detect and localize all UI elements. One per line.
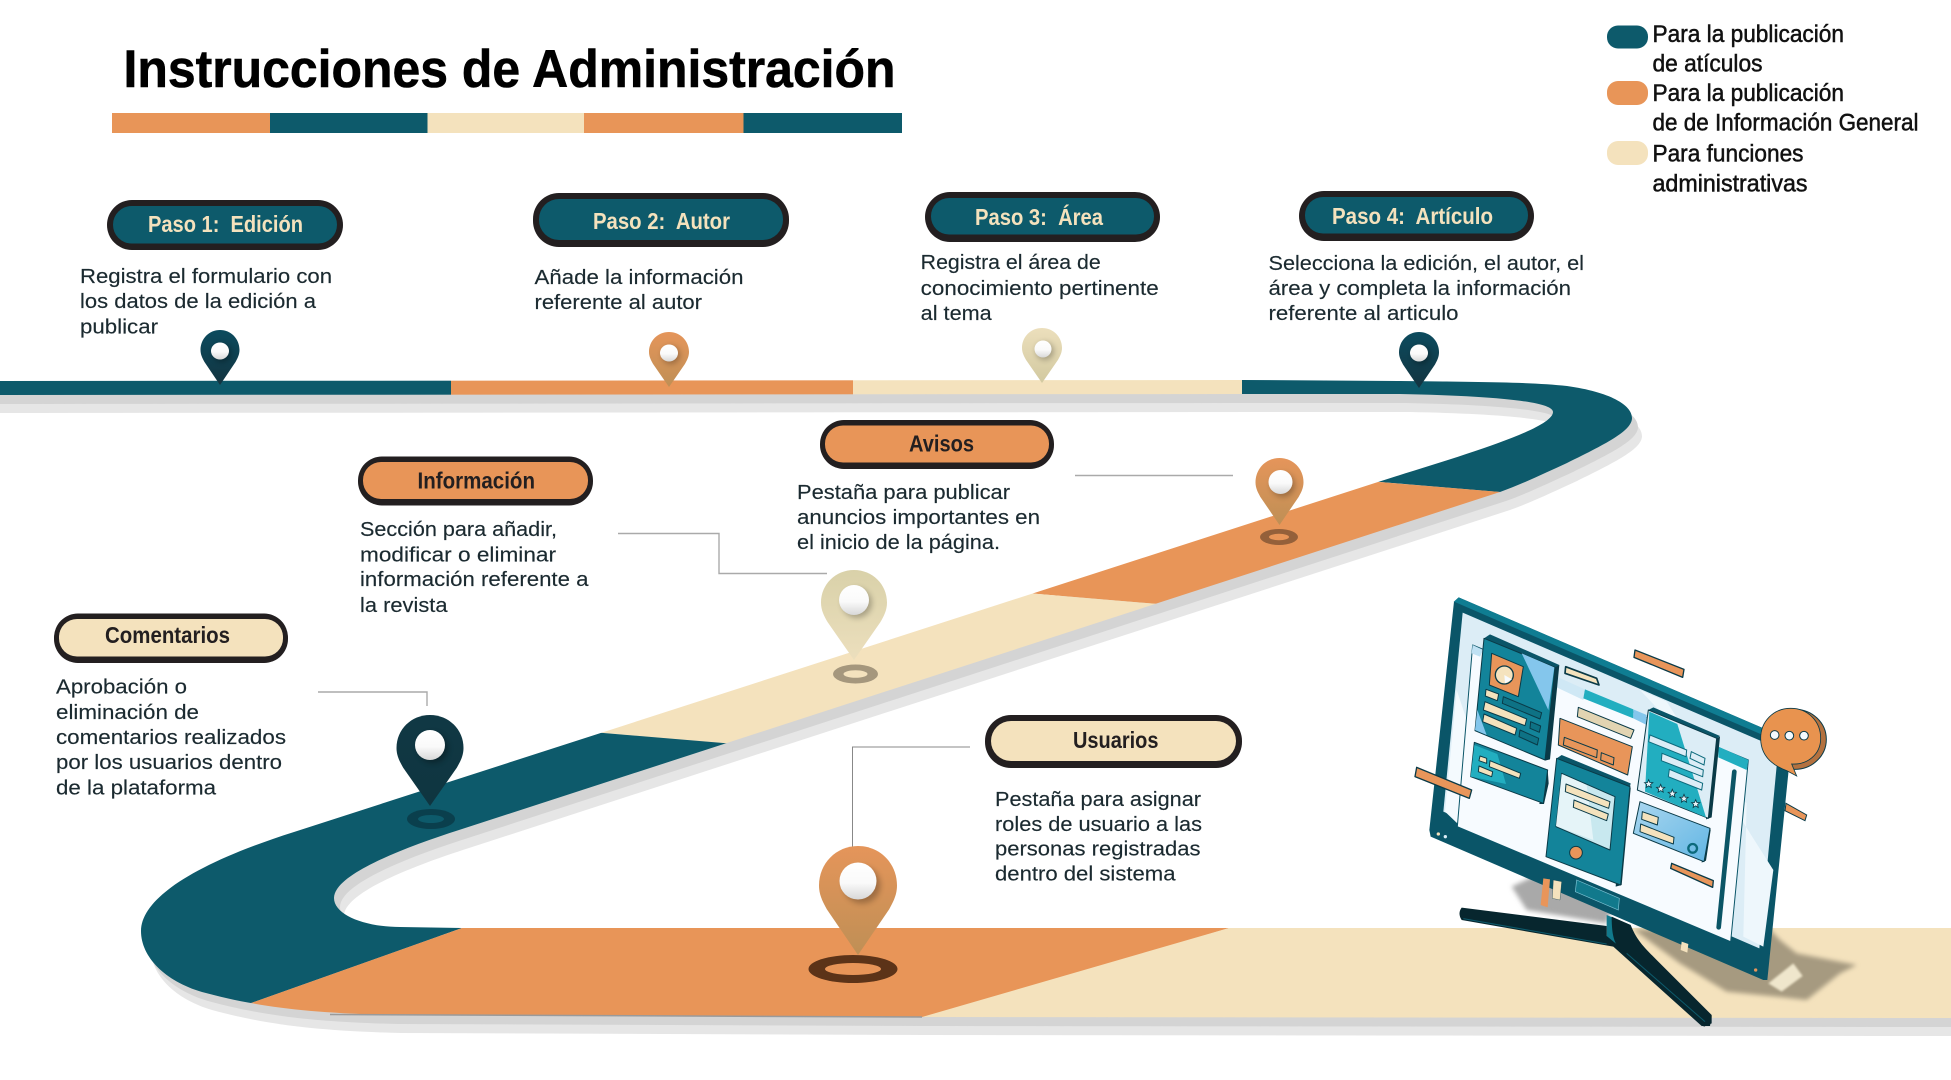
pill: Paso 2 — [533, 193, 789, 247]
pin: step 3 — [1022, 328, 1062, 383]
legend — [1607, 21, 1918, 198]
pill: Usuarios — [985, 715, 1242, 768]
legend item: administrative functions: administrativas — [1652, 170, 1808, 198]
text: comentarios: de la plataforma — [56, 778, 217, 800]
text: step 1: Registra el formulario con — [80, 266, 332, 288]
text: step 3: Registra el área de — [921, 252, 1101, 274]
pill: Paso 3 — [925, 192, 1160, 242]
text: step 1: los datos de la edición a — [80, 291, 317, 313]
pill: Paso 1: Paso 1: Edición — [148, 211, 303, 237]
stand — [1459, 908, 1712, 1027]
text: usuarios: personas registradas — [995, 838, 1200, 860]
dashboard card: orange — [1558, 718, 1632, 775]
hanging tags — [1541, 878, 1688, 953]
step 2: autor — [533, 193, 789, 314]
pill: Avisos: Avisos — [909, 430, 974, 456]
pin: información — [821, 570, 887, 684]
text: step 3: conocimiento pertinente — [921, 278, 1159, 300]
text: step 2 — [534, 267, 744, 314]
floating orange bar left — [1415, 767, 1472, 798]
road colour segments — [0, 370, 1951, 1040]
pill: Paso 3: Paso 3: Área — [975, 203, 1103, 230]
floating orange bar top — [1634, 650, 1684, 677]
text: comentarios: eliminación de — [56, 702, 199, 724]
section: comentarios — [54, 614, 288, 800]
text: step 3 — [921, 252, 1159, 325]
text: usuarios: Pestaña para asignar — [995, 789, 1201, 811]
pill: Comentarios: Comentarios — [105, 622, 230, 648]
legend item: articles — [1607, 21, 1844, 78]
pin: avisos — [1256, 458, 1304, 545]
dashboard card: centre — [1546, 755, 1631, 887]
legend item: administrative functions — [1607, 140, 1808, 198]
legend item: articles: de atículos — [1652, 50, 1762, 78]
step 3: área — [921, 192, 1160, 325]
text: avisos: el inicio de la página. — [797, 532, 1000, 554]
legend item: articles: Para la publicación — [1652, 21, 1844, 48]
text: comentarios: Aprobación o — [56, 676, 187, 698]
orange bar — [1671, 863, 1713, 887]
text: step 2: referente al autor — [534, 292, 702, 314]
legend item: administrative functions: Para funciones — [1652, 140, 1804, 168]
screen page — [1457, 645, 1748, 942]
pin: comentarios — [396, 715, 464, 829]
text: usuarios — [995, 789, 1202, 886]
step 4: artículo — [1268, 191, 1584, 325]
dashboard card: lower left — [1471, 742, 1549, 804]
dashboard card: chart — [1475, 634, 1559, 761]
pill: Información: Información — [418, 468, 535, 494]
small cream bar — [1565, 667, 1599, 685]
text: step 4 — [1268, 253, 1584, 325]
text: step 3: al tema — [921, 303, 993, 325]
text: avisos: Pestaña para publicar — [797, 482, 1010, 504]
section: avisos — [797, 420, 1054, 554]
pill: Comentarios — [54, 614, 288, 663]
text: avisos: anuncios importantes en — [797, 507, 1040, 529]
pin: step 2 — [649, 332, 689, 387]
text: usuarios: dentro del sistema — [995, 864, 1176, 886]
leader lines — [318, 476, 1233, 848]
orange tag behind monitor right — [1785, 803, 1807, 821]
pill: Paso 2: Paso 2: Autor — [593, 208, 730, 234]
text: step 4: Selecciona la edición, el autor, el — [1268, 253, 1584, 275]
illustration: computer monitor — [1415, 597, 1857, 1027]
dashboard card: rating — [1637, 707, 1720, 819]
text: usuarios: roles de usuario a las — [995, 814, 1202, 836]
legend item: general information — [1607, 80, 1918, 136]
pill: Usuarios: Usuarios — [1073, 727, 1158, 753]
road shadow — [0, 389, 1951, 1036]
text: step 4: área y completa la información — [1268, 278, 1571, 300]
section: usuarios — [985, 715, 1242, 886]
pill: Paso 4 — [1299, 191, 1534, 241]
pin: step 4 — [1399, 332, 1439, 388]
text: avisos — [797, 482, 1040, 554]
section: información — [358, 456, 593, 617]
winding road — [0, 370, 1951, 1040]
text: step 4: referente al articulo — [1268, 303, 1458, 325]
speech bubble icon — [1761, 708, 1826, 776]
title: Instrucciones de Administración — [124, 40, 896, 99]
text: step 1: publicar — [80, 316, 158, 338]
text: información: modificar o eliminar — [360, 544, 556, 566]
text: información: la revista — [360, 595, 448, 617]
legend item: general information: Para la publicación — [1652, 80, 1844, 107]
text: información — [360, 519, 589, 617]
text: comentarios: por los usuarios dentro — [56, 752, 282, 774]
text: step 1 — [80, 266, 332, 338]
pill: Paso 4: Paso 4: Artículo — [1332, 203, 1493, 229]
pin: step 1 — [200, 330, 240, 385]
text: comentarios — [56, 676, 286, 800]
pill: Avisos — [820, 420, 1054, 469]
monitor shadows — [1512, 873, 1857, 1000]
road bottom edge line — [330, 1014, 922, 1017]
pill: Información — [358, 456, 593, 506]
monitor frame — [1429, 597, 1788, 980]
step 1: edición — [80, 200, 343, 338]
text: información: información referente a — [360, 569, 589, 591]
cream bar — [1577, 707, 1634, 738]
legend item: general information: de de Información General — [1652, 110, 1918, 136]
text: step 2: Añade la información — [534, 267, 744, 289]
title colour bar — [112, 113, 902, 133]
text: información: Sección para añadir, — [360, 519, 557, 541]
pill: Paso 1 — [107, 200, 343, 250]
text: comentarios: comentarios realizados — [56, 727, 286, 749]
dashboard card: settings — [1633, 802, 1711, 863]
pin: usuarios — [808, 846, 898, 983]
